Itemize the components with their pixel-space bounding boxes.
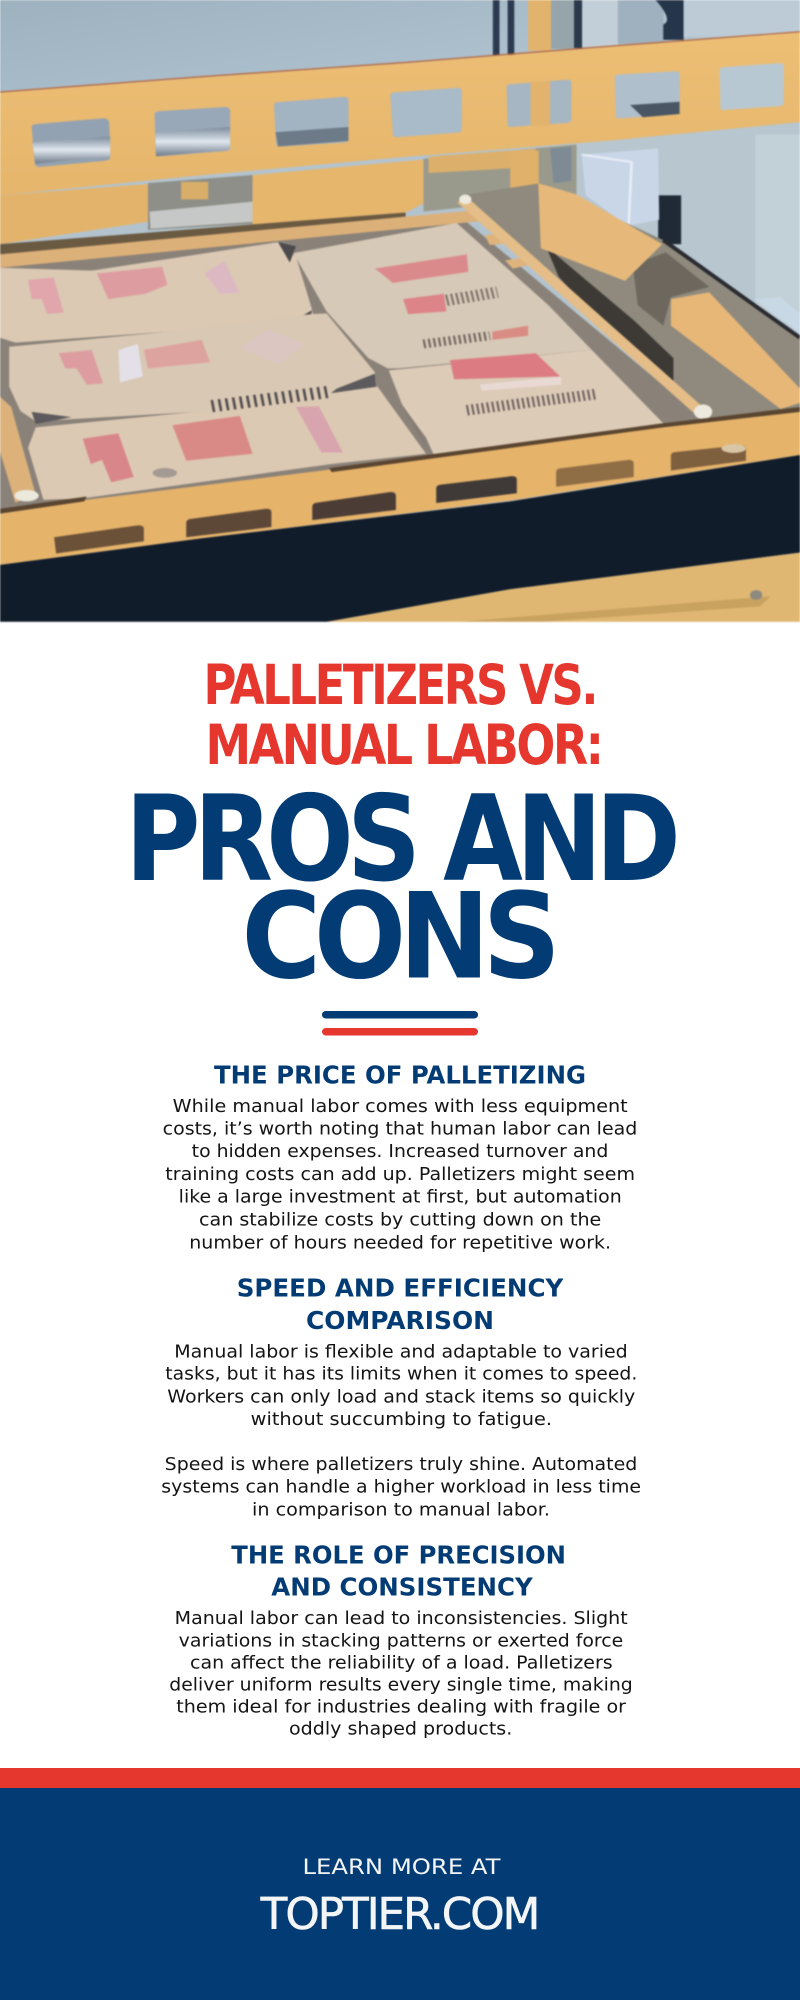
section: speed and efficiency comparison	[161, 1274, 641, 1520]
title	[125, 653, 676, 1007]
right machinery: blocks, track and diagonal rod	[459, 183, 800, 419]
body text: costs, it’s worth noting that human labor can lead	[163, 1118, 637, 1140]
heading: COMPARISON	[306, 1306, 494, 1335]
bag: middle left	[9, 313, 377, 424]
footer: website: TOPTIER.COM	[260, 1890, 538, 1940]
body text: number of hours needed for repetitive work.	[189, 1232, 611, 1253]
cement bags	[0, 223, 663, 500]
body text: tasks, but it has its limits when it comes to speed.	[165, 1364, 637, 1385]
rear rods	[485, 230, 538, 269]
body text: training costs can add up. Palletizers might seem	[165, 1164, 635, 1185]
body text: variations in stacking patterns or exerted force	[179, 1630, 623, 1651]
bag: top right	[293, 223, 592, 368]
title: red lines	[204, 653, 602, 777]
navy footer	[0, 1788, 800, 2000]
divider bars	[322, 1011, 478, 1036]
bag: bottom left	[28, 387, 426, 500]
title: red lines: MANUAL LABOR:	[206, 713, 602, 777]
black conveyor band	[0, 455, 800, 622]
body text: like a large investment at first, but automation	[179, 1187, 622, 1208]
title: navy lines: PROS AND	[125, 771, 676, 909]
warehouse background	[0, 0, 800, 622]
body text	[163, 1096, 637, 1253]
white strip below photo	[0, 622, 800, 630]
tray floor shadow	[0, 216, 704, 509]
heading: THE PRICE OF PALLETIZING	[214, 1060, 586, 1089]
upper yellow beam with cut-outs	[0, 32, 800, 195]
title: navy lines: CONS	[242, 869, 554, 1007]
body text: Workers can only load and stack items so quickly	[167, 1386, 636, 1407]
body text	[161, 1341, 641, 1520]
hero photo: palletizer with cement bags	[0, 0, 800, 623]
body text: can affect the reliability of a load. Palletizers	[190, 1652, 613, 1674]
rod end cap	[14, 490, 39, 501]
body text: systems can handle a higher workload in less time	[161, 1477, 641, 1498]
body text: in comparison to manual labor.	[252, 1500, 550, 1520]
body text: Manual labor can lead to inconsistencies. Slight	[175, 1608, 628, 1629]
body text: oddly shaped products.	[289, 1718, 512, 1740]
body text: deliver uniform results every single time, making	[169, 1675, 633, 1696]
section: the price of palletizing	[163, 1060, 637, 1253]
heading: AND CONSISTENCY	[271, 1573, 534, 1602]
body text: Speed is where palletizers truly shine. Automated	[165, 1454, 637, 1475]
lower yellow frame with slots	[0, 407, 800, 565]
bag: bottom right	[389, 350, 663, 455]
tan cross rod	[0, 206, 537, 268]
bag: top left	[0, 242, 314, 343]
body text: them ideal for industries dealing with fragile or	[176, 1696, 627, 1718]
body text: to hidden expenses. Increased turnover and	[192, 1141, 608, 1162]
heading	[237, 1274, 564, 1335]
title: red lines: PALLETIZERS VS.	[204, 653, 596, 717]
mid machinery and lower beam segments	[0, 144, 659, 254]
bottom yellow rail	[327, 553, 800, 622]
title: navy lines	[125, 771, 676, 1007]
body text: can stabilize costs by cutting down on the	[199, 1209, 601, 1230]
body text: Manual labor is flexible and adaptable to varied	[174, 1341, 628, 1362]
section: the role of precision and consistency	[169, 1540, 633, 1740]
heading	[231, 1540, 566, 1602]
body text	[169, 1608, 633, 1740]
left front rod	[0, 397, 36, 503]
footer: learn more: LEARN MORE AT	[302, 1855, 501, 1880]
body text: While manual labor comes with less equipment	[173, 1096, 628, 1117]
body text: without succumbing to fatigue.	[251, 1409, 552, 1430]
red footer stripe	[0, 1768, 800, 1788]
heading: THE ROLE OF PRECISION	[231, 1540, 566, 1569]
heading: SPEED AND EFFICIENCY	[237, 1274, 564, 1303]
